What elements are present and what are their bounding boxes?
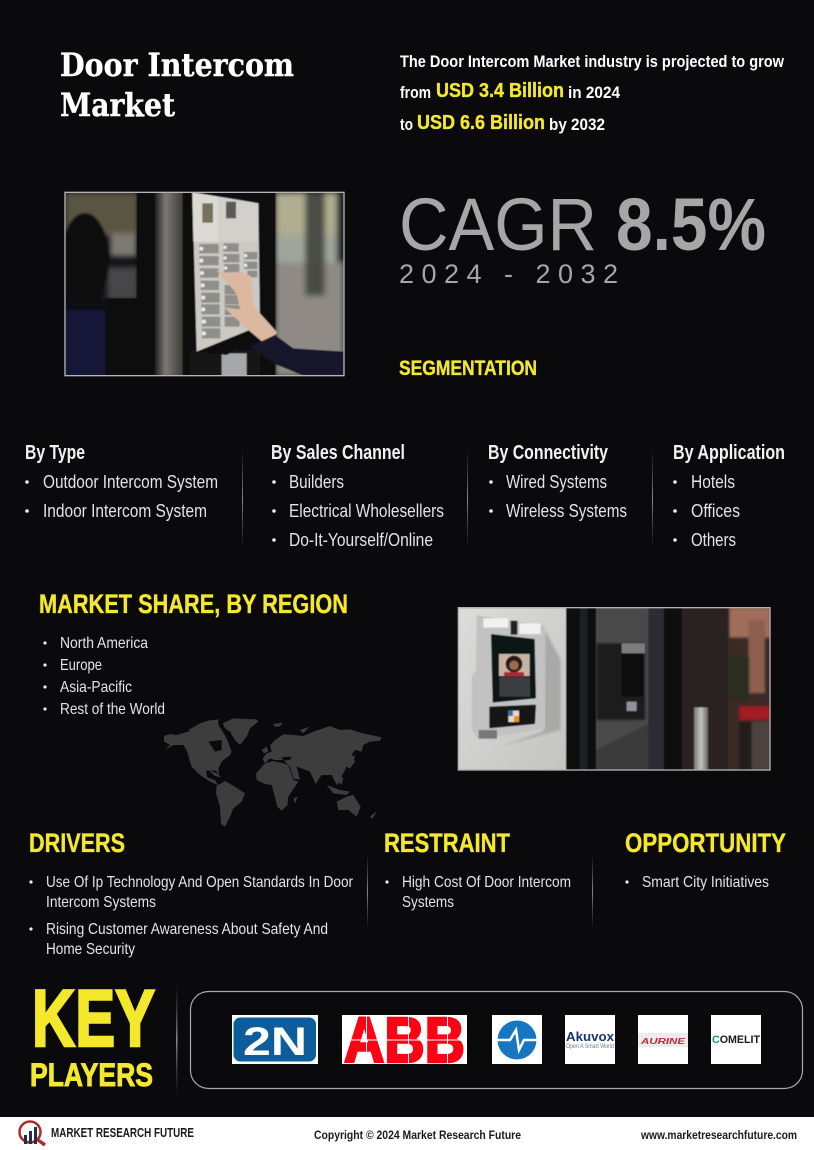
heading: market share by region: MARKET SHARE, BY REGION (39, 589, 348, 619)
column: restraint: RESTRAINT (384, 828, 510, 858)
column: by connectivity: Wireless Systems (506, 501, 627, 521)
column: drivers: Use Of Ip Technology And Open Standards In Door (46, 874, 354, 891)
heading: key players: KEY (32, 974, 155, 1064)
panel: key player logos (190, 992, 802, 1088)
CAGR figure: CAGR (399, 183, 597, 266)
title (60, 46, 294, 124)
photo: finger pressing intercom panel (62, 192, 344, 377)
footer copyright: Copyright © 2024 Market Research Future (314, 1128, 521, 1142)
column: restraint: Systems (402, 894, 454, 911)
icon: market research future logo (20, 1122, 45, 1145)
column: by type: By Type (25, 442, 85, 464)
market size headline: by 2032 (549, 115, 605, 134)
column: by application: Hotels (691, 472, 735, 492)
column: drivers: DRIVERS (29, 828, 125, 858)
column: by application: Offices (691, 501, 740, 521)
heading: key players: PLAYERS (30, 1057, 153, 1093)
column: by type: Outdoor Intercom System (43, 472, 218, 492)
world map (164, 718, 382, 827)
column: restraint (384, 828, 571, 911)
CAGR figure: 8.5% (616, 183, 766, 266)
column: by connectivity: Wired Systems (506, 472, 607, 492)
title: Door Intercom (60, 46, 294, 84)
column: by application (673, 442, 785, 550)
column: by sales channel: Builders (289, 472, 344, 492)
list: regions: Europe (60, 657, 102, 674)
market size headline (400, 52, 785, 134)
market size headline: in 2024 (568, 83, 620, 102)
column: by type (25, 442, 218, 521)
logo: Comelit (711, 1015, 761, 1064)
column: by application: Others (691, 530, 736, 550)
column: by connectivity: By Connectivity (488, 442, 609, 464)
logo: Aurine: AURINE (640, 1037, 686, 1046)
logo: Akuvox: Open A Smart World (566, 1044, 614, 1050)
list: regions (43, 635, 165, 718)
heading: segmentation: SEGMENTATION (399, 357, 537, 380)
market size headline: to (400, 115, 413, 134)
column: by sales channel: Electrical Wholesellers (289, 501, 444, 521)
column: by application: By Application (673, 442, 785, 464)
CAGR figure (399, 183, 766, 289)
logo: Akuvox: Akuvox (566, 1029, 615, 1044)
list: regions: Asia-Pacific (60, 679, 132, 696)
logo: ABB: ABB (344, 1004, 465, 1076)
heading: key players (30, 974, 155, 1093)
logo: Aurine (638, 1015, 688, 1064)
column: opportunity: Smart City Initiatives (642, 874, 769, 891)
list: regions: Rest of the World (60, 701, 165, 718)
column: by connectivity (488, 442, 627, 521)
column: by sales channel (271, 442, 444, 550)
column: drivers: Intercom Systems (46, 894, 156, 911)
column: opportunity (625, 828, 786, 891)
CAGR figure: 2024 - 2032 (399, 259, 618, 289)
logo: blue circle (492, 1015, 542, 1064)
column: drivers: Home Security (46, 941, 135, 958)
market size headline: from (400, 83, 431, 102)
market size headline: USD 3.4 Billion (436, 80, 564, 102)
column: by type: Indoor Intercom System (43, 501, 207, 521)
footer brand: MARKET RESEARCH FUTURE (51, 1125, 194, 1140)
market size headline: USD 6.6 Billion (417, 112, 545, 134)
logo: Akuvox (565, 1015, 615, 1064)
column: drivers (29, 828, 354, 958)
column: by sales channel: Do-It-Yourself/Online (289, 530, 433, 550)
column: by sales channel: By Sales Channel (271, 442, 405, 464)
column: drivers: Rising Customer Awareness About Safety And (46, 921, 328, 938)
list: regions: North America (60, 635, 148, 652)
logo: Comelit: COMELIT (712, 1034, 760, 1046)
logo: 2N (232, 1015, 318, 1064)
title: Market (60, 86, 175, 124)
photo: wall-mounted video intercom (458, 608, 770, 770)
logo: 2N: 2N (243, 1020, 307, 1064)
footer (0, 1117, 814, 1150)
column: restraint: High Cost Of Door Intercom (402, 874, 571, 891)
